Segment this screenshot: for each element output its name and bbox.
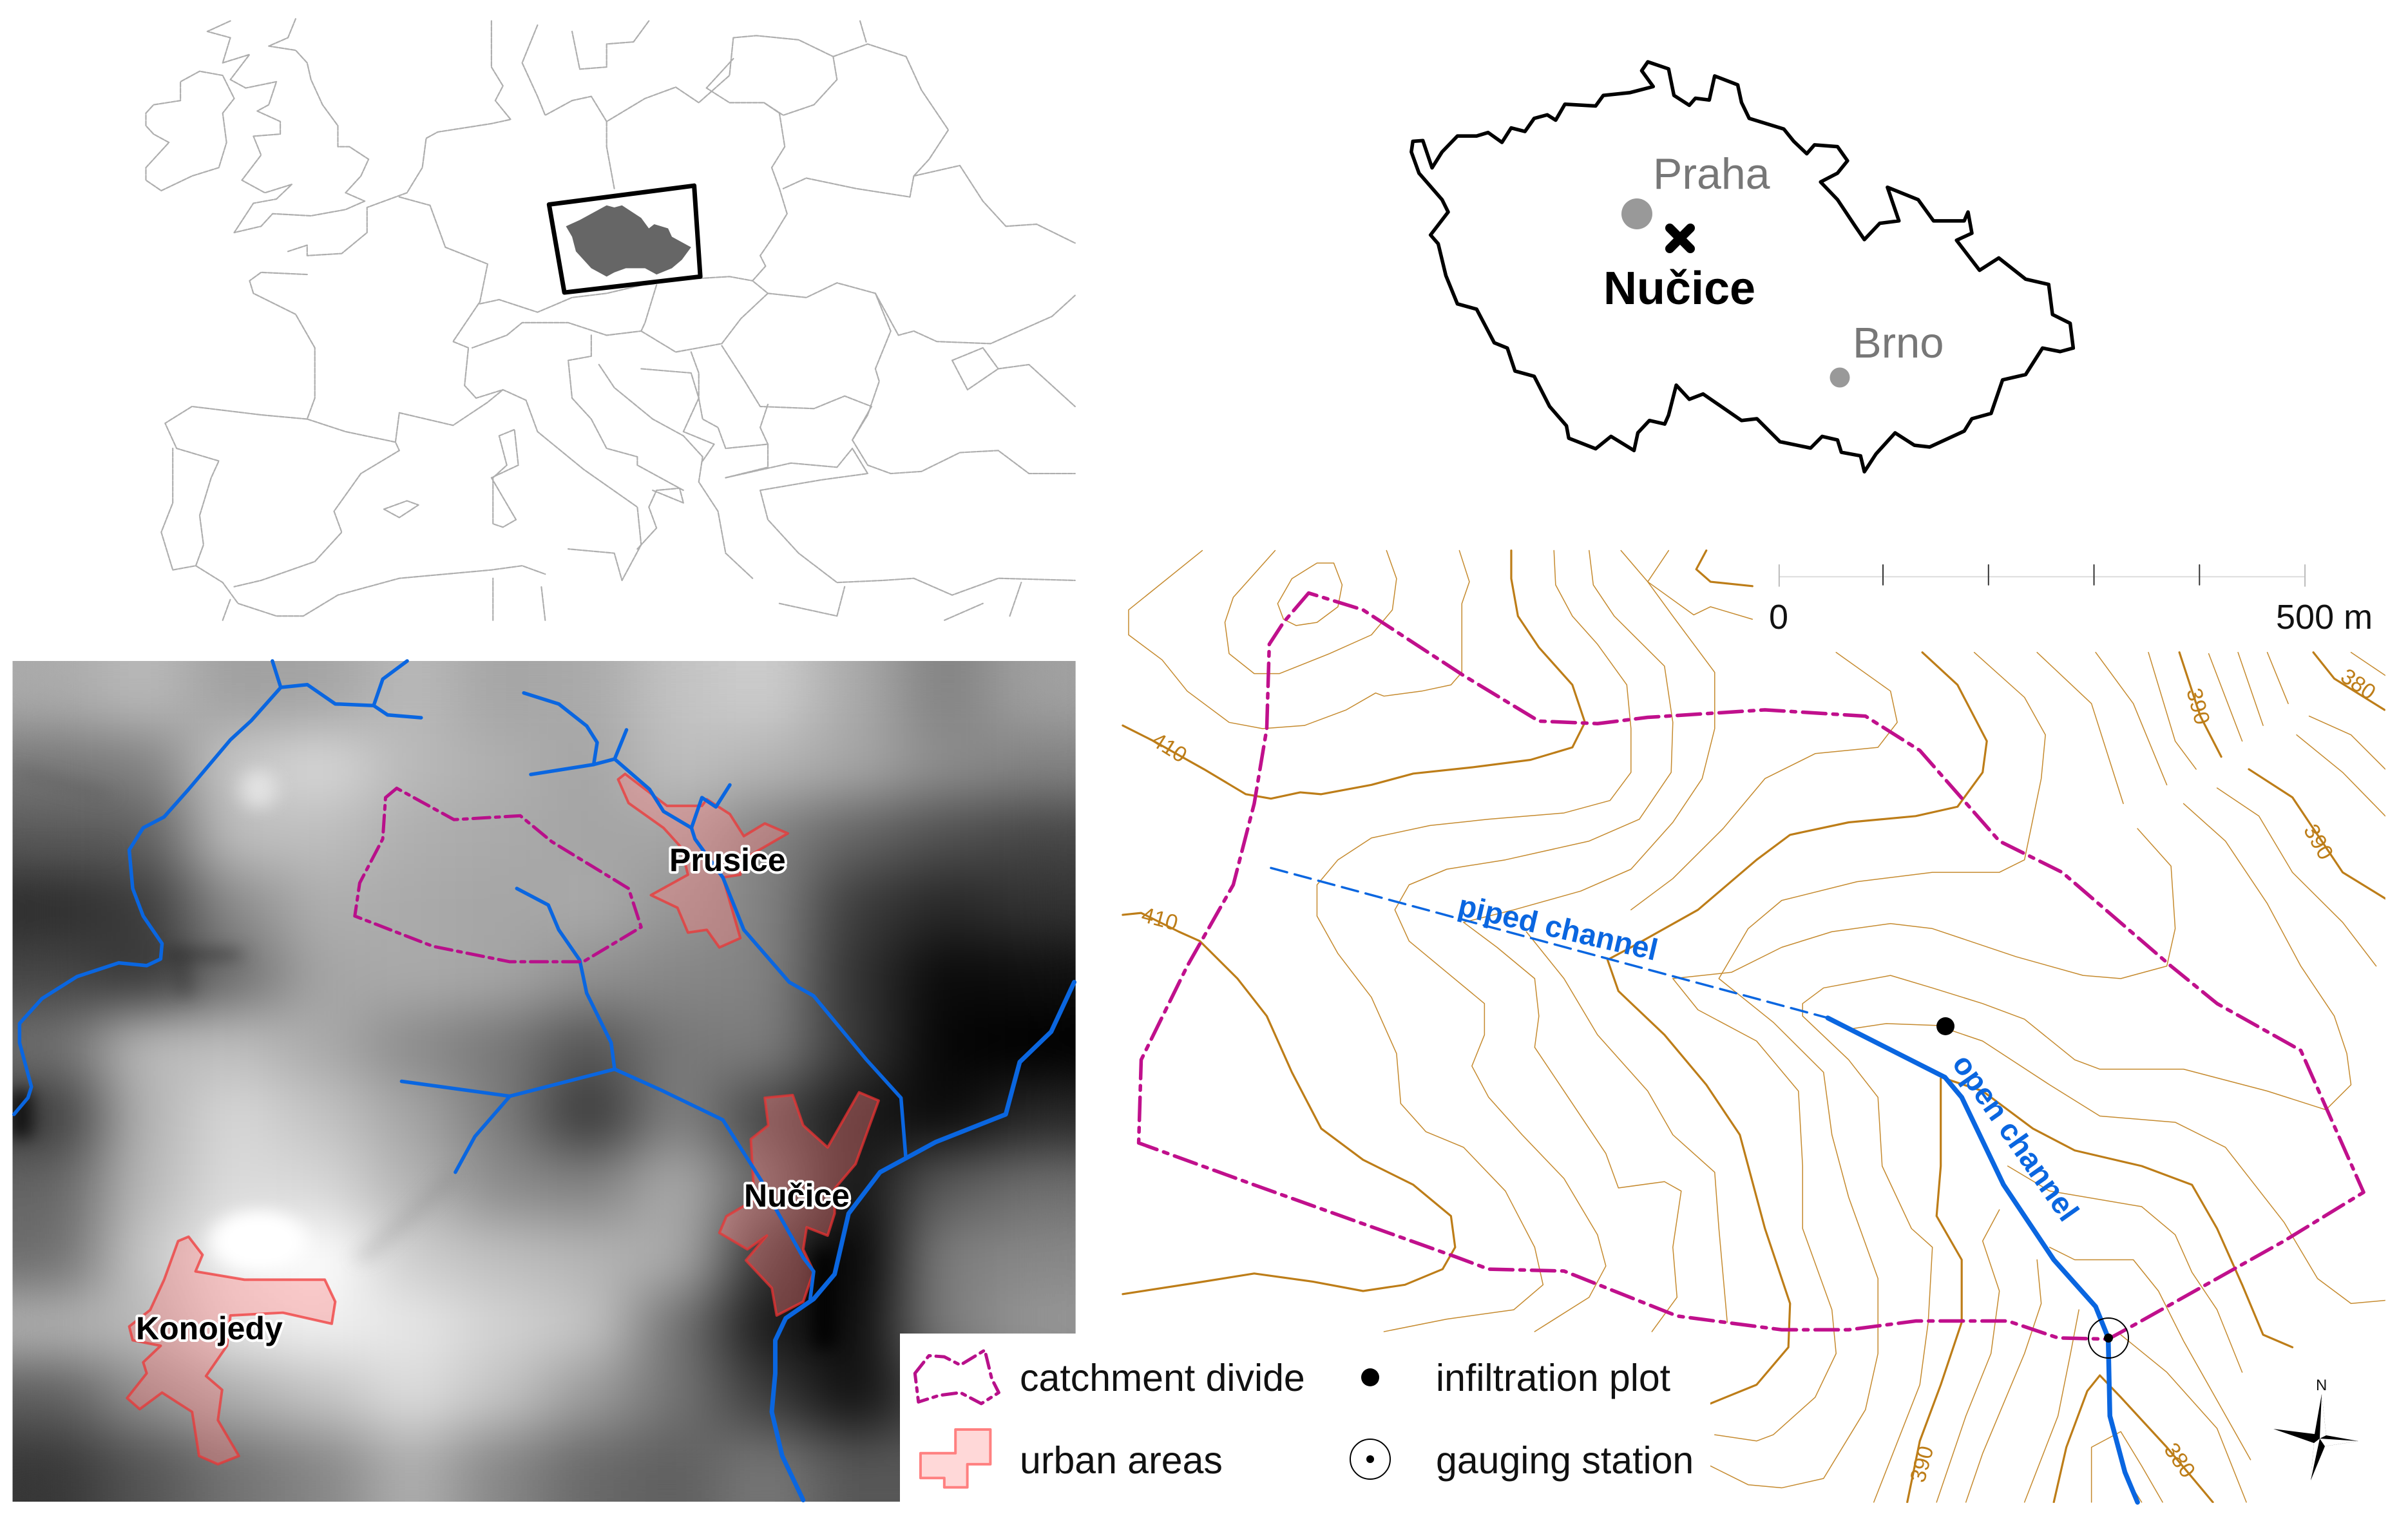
country outlines of Europe [146, 19, 1075, 620]
contour label 380 bottom: 380 [2159, 1439, 2200, 1482]
contour lines [1123, 551, 2385, 1502]
scale label: 0: 0 [1769, 598, 1788, 636]
scale label: 500 m: 500 m [2276, 598, 2373, 636]
piped channel [1271, 868, 1828, 1018]
Czech Republic outline [1411, 62, 2073, 472]
contour label 390 top: 390 [2181, 685, 2215, 727]
Brno marker [1830, 367, 1850, 388]
legend swatch: urban areas [921, 1430, 990, 1488]
legend text: catchment divide: catchment divide [1020, 1357, 1305, 1399]
scale bar [1779, 565, 2305, 586]
streams [14, 661, 1074, 1500]
map label: Konojedy: Konojedy [136, 1310, 283, 1346]
catchment divide [1139, 593, 2364, 1339]
Praha label: Praha [1653, 149, 1770, 198]
contour label 410 lower: 410 [1139, 903, 1181, 935]
Nučice marker [1670, 228, 1690, 249]
legend text: gauging station: gauging station [1436, 1439, 1694, 1482]
contour label 410: 410 [1147, 728, 1191, 768]
urban area: Nučice [720, 1093, 879, 1315]
map label: Nučice: Nučice [744, 1178, 850, 1214]
Nučice label: Nučice [1603, 263, 1755, 314]
channel label: open channel: open channel [1946, 1047, 2086, 1227]
Praha marker [1621, 198, 1652, 229]
contour label 380 top: 380 [2336, 664, 2380, 705]
panel: Czech Republic map [1411, 62, 2073, 472]
legend text: urban areas: urban areas [1020, 1439, 1223, 1482]
panel: Europe overview map [146, 19, 1075, 620]
legend icon: gauging station [1350, 1439, 1390, 1479]
north letter: N [2316, 1377, 2327, 1394]
urban area: Prusice [618, 774, 788, 948]
elevation shading [13, 661, 1076, 1502]
panel: elevation model map [13, 661, 1076, 1502]
Czech Republic silhouette [566, 206, 691, 276]
infiltration plot point [1936, 1017, 1954, 1035]
locator frame [549, 186, 700, 292]
legend icon: infiltration plot [1361, 1368, 1379, 1386]
legend text: infiltration plot: infiltration plot [1436, 1357, 1670, 1399]
legend [900, 1334, 1710, 1502]
contour label 390 right: 390 [2298, 820, 2338, 864]
panel: topographic contour map [1123, 551, 2385, 1502]
open channel [1828, 1018, 2137, 1502]
urban area: Konojedy [127, 1237, 335, 1464]
catchment outline on elevation map [355, 789, 641, 962]
map label: Prusice: Prusice [669, 842, 786, 878]
contour label 390 bottom: 390 [1906, 1443, 1938, 1485]
Brno label: Brno [1853, 319, 1944, 367]
gauging station point [2088, 1318, 2128, 1358]
legend background [900, 1334, 1710, 1502]
icon: north arrow compass [2273, 1377, 2358, 1480]
legend swatch: catchment divide [915, 1350, 999, 1404]
channel label: piped channel: piped channel [1455, 888, 1661, 967]
